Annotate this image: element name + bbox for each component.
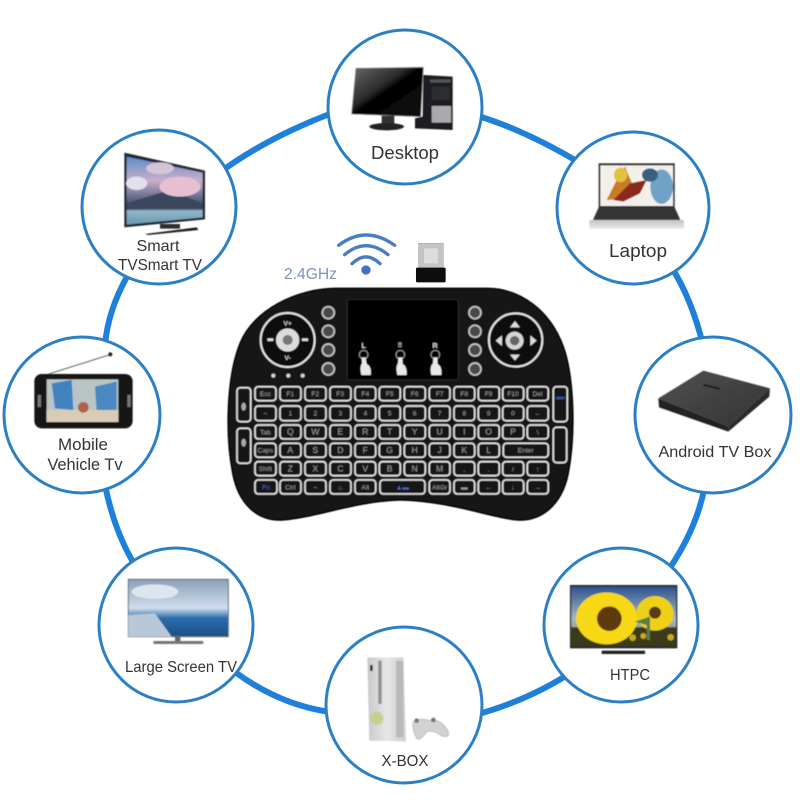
icon: usb dongle: [416, 243, 446, 282]
key labels: ~: [313, 484, 317, 491]
touchpad: L: [361, 341, 366, 350]
key labels: ↑: [536, 466, 539, 473]
key labels: →: [534, 484, 541, 491]
label: Mobile: Mobile: [58, 436, 108, 454]
key labels: ▲▬: [396, 484, 409, 491]
label: Large Screen TV: Large Screen TV: [125, 659, 237, 676]
key labels: 1: [288, 411, 292, 418]
key labels: Alt: [361, 484, 369, 491]
device: Smart TV: [82, 130, 236, 284]
label: Desktop: Desktop: [371, 142, 439, 163]
key labels: ▬: [461, 484, 468, 491]
key labels: F2: [311, 391, 319, 398]
icon: wifi signal: [339, 235, 395, 275]
key labels: Ctrl: [285, 484, 296, 491]
status lights: [271, 374, 305, 378]
left control wheel: [261, 313, 315, 367]
key labels: L: [486, 445, 491, 455]
key labels: A: [287, 445, 293, 455]
device: X-BOX: [326, 627, 482, 783]
key labels: ,: [463, 466, 465, 473]
key labels: Enter: [518, 448, 534, 455]
key labels: B: [387, 463, 393, 473]
key labels: F9: [485, 391, 493, 398]
device: Large Screen TV: [99, 548, 253, 702]
key labels: Caps: [258, 448, 274, 455]
key labels: K: [461, 445, 467, 455]
key labels: F10: [507, 391, 519, 398]
touchpad: ⠿: [398, 341, 403, 349]
key labels: H: [412, 445, 418, 455]
icon: portable tv: [34, 352, 133, 428]
touchpad: [347, 299, 458, 380]
touchpad: R: [432, 341, 438, 350]
key labels: O: [485, 427, 492, 437]
icon: laptop: [589, 163, 684, 229]
key labels: F8: [460, 391, 468, 398]
label: Android TV Box: Android TV Box: [658, 444, 772, 461]
key labels: .: [488, 466, 490, 473]
key labels: Shift: [259, 466, 272, 473]
icon: large tv: [128, 579, 228, 644]
key labels: M: [436, 463, 443, 473]
key labels: F6: [411, 391, 419, 398]
key labels: Y: [412, 427, 418, 437]
key labels: W: [311, 427, 320, 437]
key labels: S: [312, 445, 318, 455]
device: Desktop: [328, 30, 482, 184]
key labels: G: [386, 445, 393, 455]
key labels: ~: [263, 411, 267, 418]
left control wheel: V-: [285, 355, 291, 362]
key labels: ←: [485, 484, 492, 491]
label: 2.4GHz: 2.4GHz: [284, 266, 337, 283]
key labels: E: [337, 427, 343, 437]
connecting ring: [105, 112, 705, 715]
key labels: 8: [462, 411, 466, 418]
function buttons: [322, 307, 481, 375]
key labels: /: [512, 466, 514, 473]
key labels: F5: [386, 391, 394, 398]
key labels: Tab: [260, 429, 271, 436]
key labels: Q: [287, 427, 294, 437]
key labels: U: [437, 427, 443, 437]
key labels: Fn: [262, 484, 270, 491]
key labels: N: [412, 463, 418, 473]
key labels: F4: [361, 391, 369, 398]
device: Android TV Box: [635, 337, 791, 493]
label: Smart TV: Smart: [136, 238, 180, 255]
icon: smart tv: [124, 153, 205, 235]
keyboard: [228, 288, 573, 520]
key labels: 9: [487, 411, 491, 418]
key labels: 7: [438, 411, 442, 418]
key labels: 0: [511, 411, 515, 418]
left control wheel: V+: [283, 320, 292, 327]
icon: game console and controller: [367, 657, 449, 742]
right direction wheel: [489, 313, 542, 367]
side keys: [237, 387, 567, 463]
key labels: Esc: [260, 391, 272, 398]
key labels: [258, 391, 543, 491]
key labels: P: [510, 427, 516, 437]
key labels: 3: [338, 411, 342, 418]
key rows: [255, 387, 548, 494]
device: Mobile Vehicle TV: [4, 337, 160, 493]
key labels: F3: [336, 391, 344, 398]
key labels: 6: [413, 411, 417, 418]
key labels: Del: [533, 391, 543, 398]
key labels: F1: [286, 391, 295, 398]
label: Vehicle Tv: Vehicle Tv: [48, 456, 123, 474]
icon: android box: [658, 371, 770, 432]
key labels: ↓: [511, 484, 515, 491]
key labels: F7: [436, 391, 444, 398]
key labels: T: [387, 427, 393, 437]
device: Laptop: [557, 132, 709, 284]
key labels: 2: [313, 411, 317, 418]
key labels: R: [362, 427, 368, 437]
label: Laptop: Laptop: [609, 241, 667, 261]
key labels: ←: [534, 411, 541, 418]
icon: desktop computer: [352, 67, 453, 130]
key labels: \: [537, 430, 539, 437]
label: TVSmart TV: TVSmart TV: [118, 257, 202, 274]
key labels: V: [362, 463, 368, 473]
device: HTPC: [544, 548, 698, 702]
key labels: AltGr: [432, 484, 448, 491]
key labels: F: [363, 445, 368, 455]
label: X-BOX: X-BOX: [382, 753, 429, 770]
key labels: D: [337, 445, 343, 455]
key labels: Z: [288, 463, 294, 473]
key labels: I: [463, 427, 466, 437]
key labels: X: [312, 463, 318, 473]
label: HTPC: HTPC: [610, 667, 650, 684]
key labels: C: [337, 463, 343, 473]
key labels: 4: [363, 411, 367, 418]
icon: sunflower tv: [570, 585, 677, 654]
key labels: J: [437, 445, 442, 455]
key labels: 5: [388, 411, 392, 418]
key labels: ⌂: [338, 484, 342, 491]
keyboard body: [228, 288, 573, 520]
